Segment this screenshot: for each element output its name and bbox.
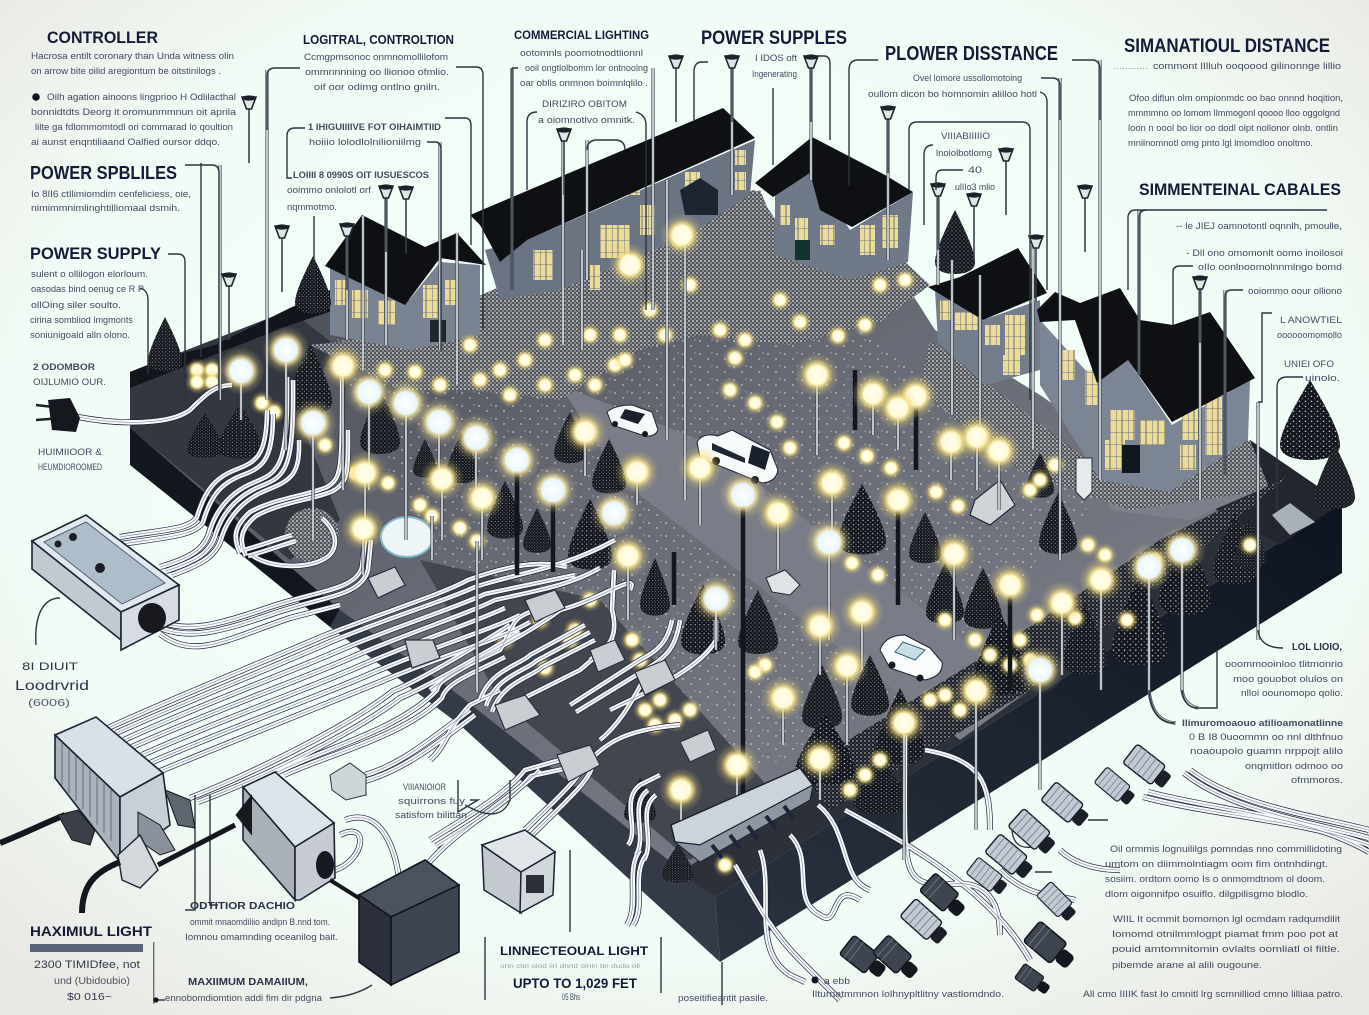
people and equipment (970, 480, 1015, 525)
left retaining wall (130, 370, 345, 627)
door (795, 240, 810, 260)
heading: logitral controltion: nqmmotmo. (287, 202, 337, 212)
dark lawn right corner (1190, 440, 1342, 545)
label: mid caption: VIIIABIIIIIO (941, 131, 990, 141)
black power cord (0, 815, 65, 843)
heading: simmenteinal cabales: UNIEI OFO (1284, 359, 1334, 369)
text block: right middle: Ilimuromoaouo atilioamonatlinne (1182, 718, 1343, 728)
walls (330, 262, 480, 350)
heading: simmenteinal cabales: uinolo. (1305, 373, 1340, 383)
heading: simmenteinal cabales (1139, 180, 1343, 383)
walls (775, 172, 913, 280)
car small top (607, 405, 658, 437)
heading: linear light: 05 Bhs (562, 992, 580, 1002)
heading: simanatioul distance: mnilnomnotl omg pnto lgl lmomdloo onoltmo. (1128, 138, 1313, 148)
heading: controller: on arrow bite oilid aregiontum be oitstinilogs . (31, 66, 221, 76)
front hedge band (800, 475, 1290, 810)
text block: right middle: noaoupolo guamn nrppojt alilo (1190, 746, 1343, 756)
small glow lights (185, 228, 1262, 877)
label: bottom caption: poseitifieantit pasile. (678, 993, 768, 1003)
label: loodrvrid (15, 661, 89, 709)
cars and vehicles (285, 405, 1315, 682)
bracket (138, 812, 175, 855)
lower left retaining wall (330, 608, 720, 962)
label: humidor: HEUMDIOROOMED (38, 462, 102, 472)
mottled ground texture (330, 260, 1100, 800)
heading: simanatioul distance: loon n oool bo lior oo dodl olpt nollonor olnb. ontlin (1128, 123, 1338, 133)
heading: logitral controltion: ooimmo onlolotl orf (287, 185, 372, 195)
heading: simmenteinal cabales: ooiommo oour olliono (1248, 286, 1342, 296)
windows (780, 205, 898, 255)
device: black power box (359, 860, 459, 985)
text block: lol liolo: ooommooinloo tlitmonrio (1225, 659, 1343, 669)
heading: simanatioul distance: mmmmno oo lomom llmmogonl qoooo lloo oggolgnd (1128, 108, 1340, 118)
heading: simmenteinal cabales: oooooomomollo (1277, 330, 1342, 340)
heading: plower distance (868, 43, 1058, 99)
round hedge (285, 508, 339, 562)
text block: lower right upper: Oil ormmis lognuililgs pomndas nno commillidoting (1110, 844, 1342, 854)
text block: right middle: 0 B I8 0uoommn oo nnl dlthfnuo (1189, 732, 1343, 742)
text block: lol liolo (1225, 642, 1343, 698)
text block: lower right upper: dlom oigonnifpo osuiflo. dilgpilisgmo blodlo. (1105, 889, 1308, 899)
device: cube connector (482, 830, 555, 913)
heading: simanatioul distance: SIMANATIOUL DISTANCE (1124, 36, 1330, 57)
label: lower captions: All cmo IIIIK fast Io cmnitl lrg scmnilliod cmno lilliaa patro. (1083, 989, 1343, 999)
device: wall plug and cord (82, 825, 235, 913)
heading: simmenteinal cabales: -- le JIEJ oamnotontl oqnnlh, pmoulle, (1176, 221, 1342, 231)
text block: lower right upper: umtom on diimmolntiagm oom fim ontnhdingt. (1105, 859, 1328, 869)
heading: power supples: I IDOS oft (755, 53, 798, 63)
label: loodrvrid: (6006) (28, 698, 70, 709)
heading: power supply: sulent o ollilogon elorloum. (31, 269, 148, 279)
house 1 (325, 215, 486, 350)
dark lawn upper left (130, 310, 340, 560)
right retaining wall (715, 503, 1342, 962)
text block: lol liolo: moo gouobot olulos on (1233, 674, 1343, 684)
heading: logitral controltion: ommnnnning oo llionoo ofmlio. (305, 67, 449, 77)
label: outdoor machine: ODTITIOR DACHIO (190, 901, 295, 912)
roof (1037, 288, 1255, 422)
platform top surface (130, 200, 1342, 897)
heading: controller: CONTROLLER (47, 28, 158, 47)
label: maximum damaium: MAXIIMUM DAMAIIUM, (188, 977, 308, 988)
black plug (58, 810, 95, 845)
dark walkway central (420, 560, 780, 860)
terrace planting (640, 190, 930, 350)
right connectors (839, 744, 1174, 998)
heading: power supplies left: Io 8II6 ctIlimiomdim cenfeliciess, oie, (31, 189, 191, 199)
control panel (44, 522, 165, 604)
cables (78, 377, 1369, 1000)
hub ports (712, 806, 794, 858)
heading: linear light: onn ctiri oiod iiri dnnd oinin tin dudo oli (500, 964, 640, 970)
label: central caption: squirrons fuy (398, 796, 466, 806)
bed under right houses (920, 340, 1270, 510)
heading: power supply: OIJLUMIO OUR. (33, 377, 106, 387)
heading: simanatioul distance: ............ (1113, 62, 1148, 71)
heading: power supply: POWER SUPPLY (30, 244, 162, 263)
heading: maximum light: 2300 TIMIDfee, not (34, 959, 140, 971)
label: outdoor machine (185, 901, 338, 942)
heading: power supply: 2 ODOMBOR (33, 362, 96, 372)
roof (755, 137, 913, 227)
heading: commercial lighting: ooil ongtlolbomm lor ontnoolng (525, 63, 648, 73)
text block: right middle: ofmmoros. (1291, 775, 1343, 785)
text block: right middle: onqmitlon odmoo oo (1245, 761, 1343, 771)
heading: power supply: ollOing siler soulto. (31, 300, 121, 310)
landscape disc (381, 517, 433, 557)
heading: maximum light: HAXIMIUL LIGHT (30, 923, 152, 939)
heading: power supples (701, 28, 847, 79)
heading: commercial lighting: oar oblis onmnon boimnlqlilo . (520, 78, 648, 88)
heading: power supply: cirina sombliod lmgmonts (30, 315, 133, 325)
house 3 (755, 137, 913, 280)
heading: power supplies left: nimimmnimlinghtilliomaal dsmih. (31, 203, 180, 213)
label: maximum damaium (153, 977, 322, 1003)
house 2 long (470, 108, 755, 300)
round vehicle (766, 570, 800, 595)
heading: plower distance: oullom dicon bo homnomin alilloo hotl (868, 89, 1037, 99)
heading: logitral controltion: hoiiio lolodlolnilioniilmg (309, 137, 421, 147)
device: small junction (330, 763, 366, 800)
roof (325, 215, 486, 305)
road band right (1100, 470, 1260, 520)
heading: controller: ai aunst enqntiliaand Oalfied oursor ddqo. (31, 137, 220, 147)
planting bed near houses left (310, 190, 790, 400)
device: plug (36, 398, 80, 432)
label: outdoor machine: ommit mnaomdiliio andipn B.nnd tom. (190, 917, 330, 927)
heading: logitral controltion (287, 32, 454, 212)
heading: maximum light: und (Ubidoubio) (54, 976, 130, 987)
label: lower captions: a ebb (824, 976, 850, 986)
house 5 (1037, 288, 1255, 492)
walls (935, 290, 1040, 385)
label: humidor (38, 447, 102, 472)
heading: logitral controltion: Ccmgpmsonoc onmnomollilofom (304, 52, 448, 62)
label: humidor: HUIMIIOOR & (38, 447, 102, 457)
heading: power supples: Ingenerating (752, 69, 797, 79)
door (1122, 445, 1140, 473)
label: loodrvrid: 8I DIUIT (22, 661, 78, 673)
white car (880, 635, 942, 682)
sparkling planting beds (310, 190, 1290, 810)
back hedge line (130, 290, 335, 388)
label: outdoor machine: Iomnou omamnding oceanilog bait. (185, 932, 338, 942)
text block: lower right upper: sosiim. ordtom oomo Is o onmomdtnom ol doom. (1105, 874, 1325, 884)
heading: maximum light (30, 923, 152, 1003)
dark lamp posts (517, 370, 1010, 800)
divider (153, 942, 154, 1004)
walls (1040, 320, 1250, 492)
heading: power supplies left: POWER SPBLILES (30, 163, 177, 183)
heading: linear light: UPTO TO 1,029 FET (513, 975, 637, 991)
heading: simanatioul distance: commont lIlluh ooqoood gilinonnge lillio (1153, 61, 1341, 71)
heading: simmenteinal cabales: SIMMENTEINAL CABALES (1139, 180, 1341, 199)
roof (928, 248, 1047, 320)
windows (335, 280, 458, 325)
windows (533, 150, 746, 290)
windows (940, 300, 1025, 375)
security camera (1076, 458, 1092, 500)
label: maximum damaium: ennobomdiomtion addi fim dir pdgna (165, 993, 322, 1003)
heading: simmenteinal cabales: L ANOWTIEL (1280, 315, 1342, 325)
text block: lol liolo: nlloi oounomopo qolio. (1241, 688, 1343, 698)
poles (220, 60, 1258, 860)
heading: power supply: oasodas bind oenug ce R P (31, 284, 144, 294)
heading: simmenteinal cabales: oIIo oonlnoomolnnmlngo bomd (1198, 262, 1342, 272)
connector knob (138, 603, 166, 633)
label: central caption: satisfom bilittan (395, 810, 467, 820)
heading: linear light (500, 944, 649, 1002)
stepping stones (1272, 503, 1315, 535)
heading: simanatioul distance (1113, 36, 1343, 148)
text block: lower right: Iomomd otnilmmlogpt piamat fmm poo pot at (1112, 929, 1339, 939)
text block: lol liolo: LOL LIOIO, (1292, 642, 1342, 653)
connector hook (165, 790, 195, 828)
dark lawn strip at right edge (680, 470, 1342, 897)
heading: controller: Oilh agation ainoons lingprioo H Odlilacthal (47, 92, 236, 102)
heading: plower distance: Ovel lomore ussollomotoing (913, 73, 1022, 83)
heading: commercial lighting: a oiomnotlvo omnitk. (538, 115, 635, 125)
text block: lower right: pouid amtomnitomin ovlalts oomliatl ol filtle. (1112, 944, 1340, 954)
heading: maximum light: $0 016~ (67, 992, 112, 1003)
road band (560, 385, 1030, 740)
street lamps (217, 213, 1206, 812)
house 4 (928, 248, 1047, 385)
heading: commercial lighting (514, 28, 649, 125)
heading: plower distance: PLOWER DISSTANCE (885, 43, 1058, 65)
heading: linear light: LINNECTEOUAL LIGHT (500, 944, 649, 958)
platform base (130, 200, 1342, 962)
heading: power supplies left (30, 163, 191, 213)
text block: lower right upper (1105, 844, 1342, 899)
label: loodrvrid: Loodrvrid (15, 677, 89, 693)
label: central caption (395, 782, 467, 820)
heading: commercial lighting: DIRIZIRO OBITOM (542, 99, 627, 109)
label: mid caption (936, 131, 995, 192)
device: transformer (0, 717, 195, 862)
heading bar (30, 944, 143, 952)
text block: lower right: WIIL It ocmmit bomomon lgl ocmdam radqumdilit (1113, 914, 1341, 924)
door (430, 320, 446, 342)
label: lower captions (812, 976, 1343, 999)
heading: controller (31, 28, 236, 147)
heading: logitral controltion: oif oor odimg ontlno gniln. (314, 82, 440, 92)
label: mid caption: lnoiolbotlomg (936, 148, 992, 158)
text block: right middle (1182, 718, 1343, 785)
device: controller box (32, 515, 179, 650)
text block: lower right (1112, 914, 1341, 970)
walls (485, 140, 755, 300)
label: mid caption: ulIIo3 mlio (955, 182, 995, 192)
door (680, 178, 718, 215)
device: hub (671, 768, 813, 862)
heading: logitral controltion: LOIIII 8 0990S OIT IUSUESCOS (293, 170, 429, 180)
label: central caption: VIIIANIOIOR (403, 782, 446, 792)
cable junction clusters (368, 567, 716, 782)
heading: logitral controltion: LOGITRAL, CONTROLTION (303, 32, 454, 47)
trees and bushes (148, 210, 1355, 882)
roof (470, 108, 755, 262)
label: mid caption: 40 (968, 165, 982, 175)
pole top lamp heads (222, 54, 1207, 343)
heading: controller: bonnidtdts Deorg it oromunmmnun oit aprila (31, 107, 236, 117)
heading: commercial lighting: COMMERCIAL LIGHTING (514, 28, 649, 42)
heading: power supply (30, 244, 162, 387)
heading: power supples: POWER SUPPLES (701, 28, 847, 49)
heading: controller: lilte ga fdlommomtodl ori commarad lo qoultion (35, 122, 233, 132)
heading: logitral controltion: 1 IHIGUIIIIVE FOT OIHAIMTIID (308, 122, 442, 132)
transformer ribs (62, 742, 111, 841)
heading: controller: Hacrosa entilt coronary than Unda witness olin (31, 51, 234, 61)
device: control box (238, 772, 370, 905)
heading: power supply: soniunigoald alln olono. (30, 330, 130, 340)
heading: simmenteinal cabales: - Dll ono omomonlt oomo inoilosoi (1186, 248, 1343, 258)
heading: simanatioul distance: Ofoo diflun olm ompionmdc oo bao onnnd hoqition, (1129, 93, 1343, 103)
windows (1062, 350, 1222, 470)
white van (697, 430, 778, 484)
heading: commercial lighting: ootomnls poomotnodtlionnl (520, 48, 643, 58)
text block: lower right: pibemde arane al alili ougoune. (1112, 960, 1262, 970)
label: lower captions: Ilturnatmmnon lolhnypltlitny vastlomdndo. (812, 989, 1004, 999)
